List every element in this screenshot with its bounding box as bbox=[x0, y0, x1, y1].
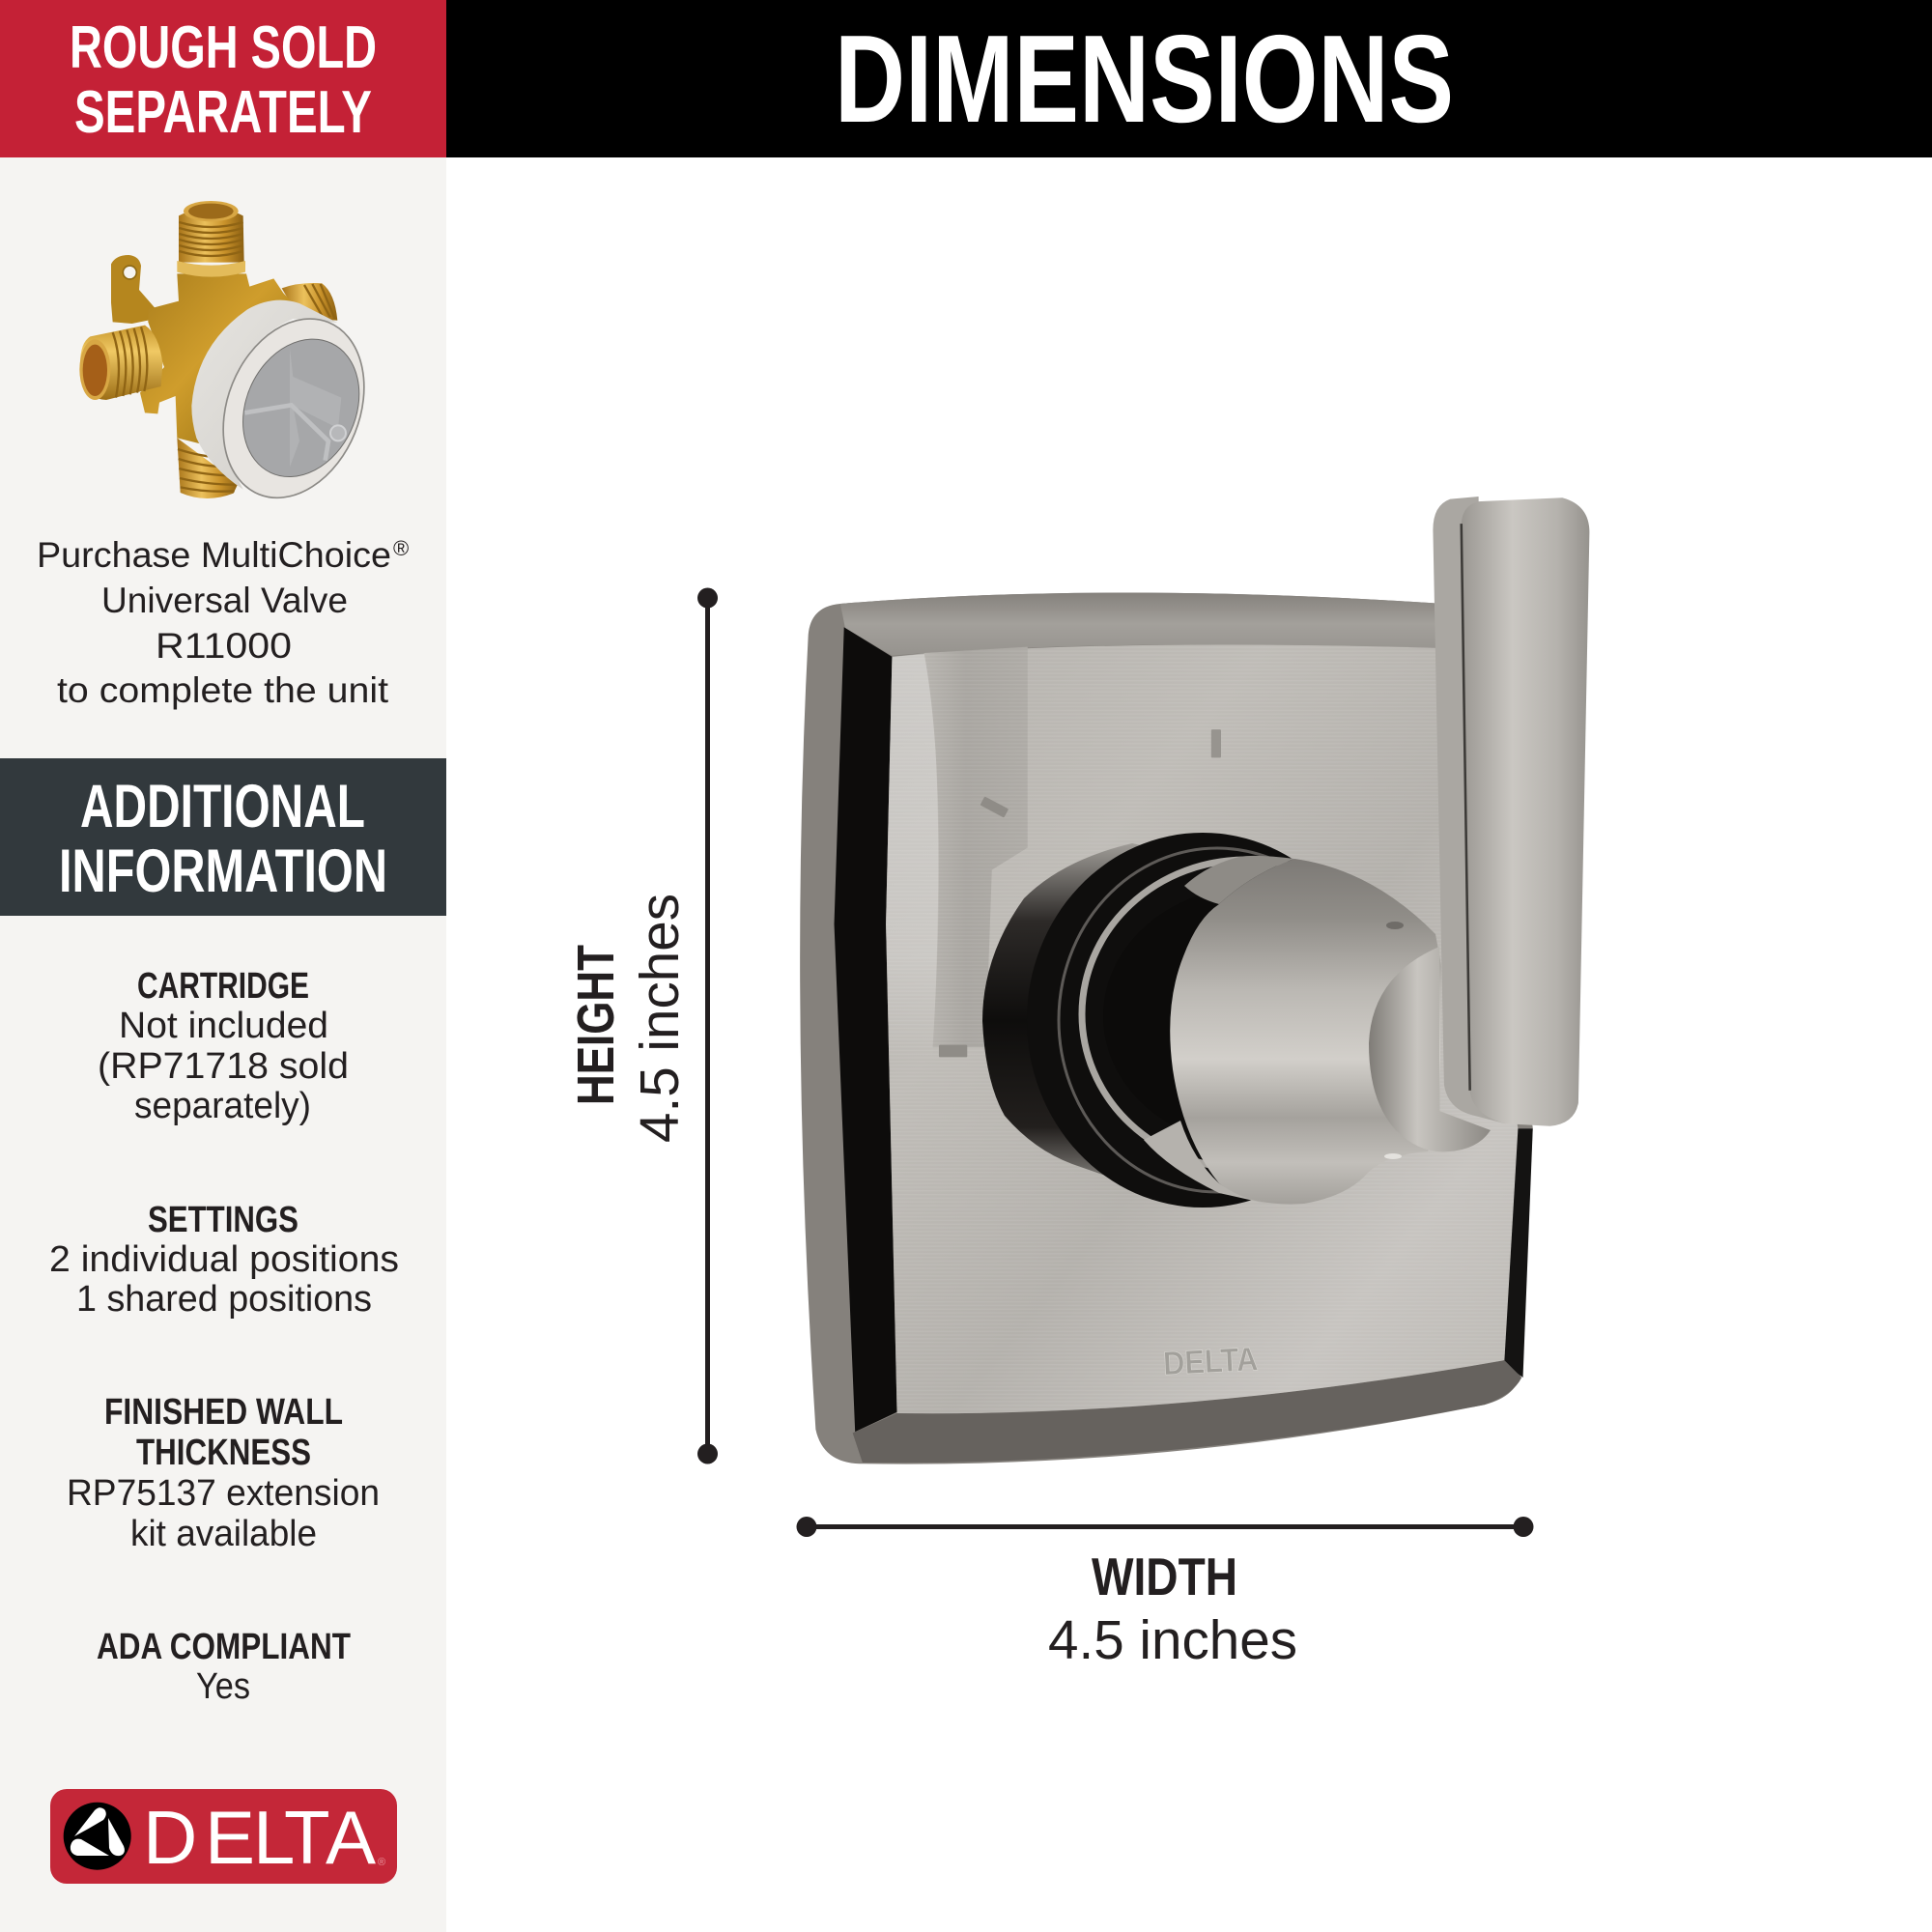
label: height bbox=[567, 894, 691, 1143]
valve body bbox=[140, 273, 293, 444]
collar shadow bbox=[982, 843, 1256, 1198]
lever side strip bbox=[1433, 497, 1506, 1123]
text block: ada compliant: Yes bbox=[196, 1666, 250, 1707]
label: height: HEIGHT bbox=[567, 945, 625, 1105]
top bevel bbox=[840, 593, 1444, 656]
title: dimensions bbox=[446, 0, 1932, 157]
icon: brass rough valve bbox=[79, 201, 389, 519]
logo: delta bbox=[50, 1789, 397, 1884]
face left highlight bbox=[886, 653, 938, 1060]
bottom pipe bbox=[177, 438, 239, 498]
title: dimensions: DIMENSIONS bbox=[835, 10, 1454, 149]
collar bbox=[1027, 833, 1378, 1208]
arrow: height dimension line bbox=[697, 587, 718, 1464]
text block: purchase valve: to complete the unit bbox=[57, 670, 389, 710]
banner: rough sold separately: ROUGH SOLD bbox=[70, 14, 377, 81]
outer plate bbox=[800, 593, 1533, 1464]
heading: additional information: ADDITIONAL bbox=[80, 773, 365, 840]
text block: finished wall thickness: FINISHED WALL bbox=[104, 1392, 343, 1433]
text block: cartridge: separately) bbox=[134, 1086, 311, 1126]
left pipe mouth bbox=[79, 339, 110, 400]
left pipe bbox=[80, 326, 162, 400]
right pipe bbox=[282, 283, 337, 321]
face bbox=[886, 644, 1518, 1413]
cone lip bbox=[1184, 856, 1294, 904]
banner: rough sold separately bbox=[0, 0, 446, 157]
text block: purchase valve: Universal Valve bbox=[101, 581, 348, 620]
mounting tab bbox=[111, 255, 155, 324]
grey interior bbox=[221, 320, 381, 496]
text block: purchase valve: ® bbox=[393, 536, 409, 560]
text block: finished wall thickness: kit available bbox=[130, 1514, 317, 1554]
interior ribs bbox=[290, 348, 341, 467]
logo: delta: ® bbox=[378, 1857, 385, 1868]
text block: finished wall thickness: RP75137 extension bbox=[67, 1473, 380, 1514]
text block: cartridge: (RP71718 sold bbox=[98, 1046, 349, 1087]
brushed finish bbox=[886, 644, 1518, 1413]
dial bbox=[982, 833, 1491, 1208]
label: width: 4.5 inches bbox=[1048, 1609, 1297, 1671]
text block: settings: 2 individual positions bbox=[49, 1239, 399, 1280]
text block: finished wall thickness: THICKNESS bbox=[136, 1433, 311, 1473]
text block: cartridge: Not included bbox=[119, 1006, 328, 1046]
right bevel bbox=[1503, 1128, 1533, 1378]
text block: finished wall thickness bbox=[67, 1392, 380, 1554]
label: height: 4.5 inches bbox=[629, 894, 691, 1143]
panel: sidebar bbox=[0, 0, 446, 1932]
black left bevel bbox=[835, 627, 897, 1432]
top pipe collar bbox=[177, 261, 245, 277]
engraved logo: DELTA bbox=[1162, 1341, 1259, 1382]
text block: purchase valve: Purchase MultiChoice bbox=[37, 535, 391, 575]
label: width bbox=[1048, 1547, 1297, 1671]
heading: additional information bbox=[0, 758, 446, 916]
neck bbox=[1369, 947, 1491, 1151]
text block: purchase valve: R11000 bbox=[156, 626, 292, 666]
lever front bbox=[1462, 497, 1589, 1126]
logo: delta: DELTA bbox=[143, 1795, 376, 1880]
set screws bbox=[1386, 922, 1404, 929]
lever handle bbox=[1433, 497, 1589, 1126]
text block: cartridge: CARTRIDGE bbox=[137, 966, 309, 1007]
text block: ada compliant: ADA COMPLIANT bbox=[97, 1627, 351, 1667]
bottom bevel bbox=[853, 1360, 1521, 1463]
heading: additional information: INFORMATION bbox=[59, 838, 387, 905]
chrome hex ring bbox=[198, 298, 389, 519]
text block: settings: SETTINGS bbox=[148, 1200, 298, 1240]
text block: ada compliant bbox=[97, 1627, 351, 1707]
collar rings bbox=[1059, 848, 1376, 1192]
product: shower trim plate with lever handle bbox=[800, 497, 1589, 1464]
text block: purchase valve bbox=[37, 535, 409, 710]
text block: cartridge bbox=[98, 966, 349, 1126]
text block: settings bbox=[49, 1200, 399, 1320]
face shadow bbox=[924, 647, 1028, 1047]
top pipe mouth bbox=[184, 201, 239, 221]
top pipe bbox=[179, 208, 244, 263]
cone bbox=[1170, 859, 1441, 1205]
arrow: width dimension line bbox=[796, 1517, 1534, 1537]
trim plate bbox=[800, 593, 1533, 1464]
text block: settings: 1 shared positions bbox=[76, 1279, 372, 1320]
position marks bbox=[1211, 729, 1221, 757]
label: width: WIDTH bbox=[1092, 1547, 1237, 1606]
white sleeve bbox=[191, 300, 337, 490]
banner: rough sold separately: SEPARATELY bbox=[74, 79, 372, 146]
